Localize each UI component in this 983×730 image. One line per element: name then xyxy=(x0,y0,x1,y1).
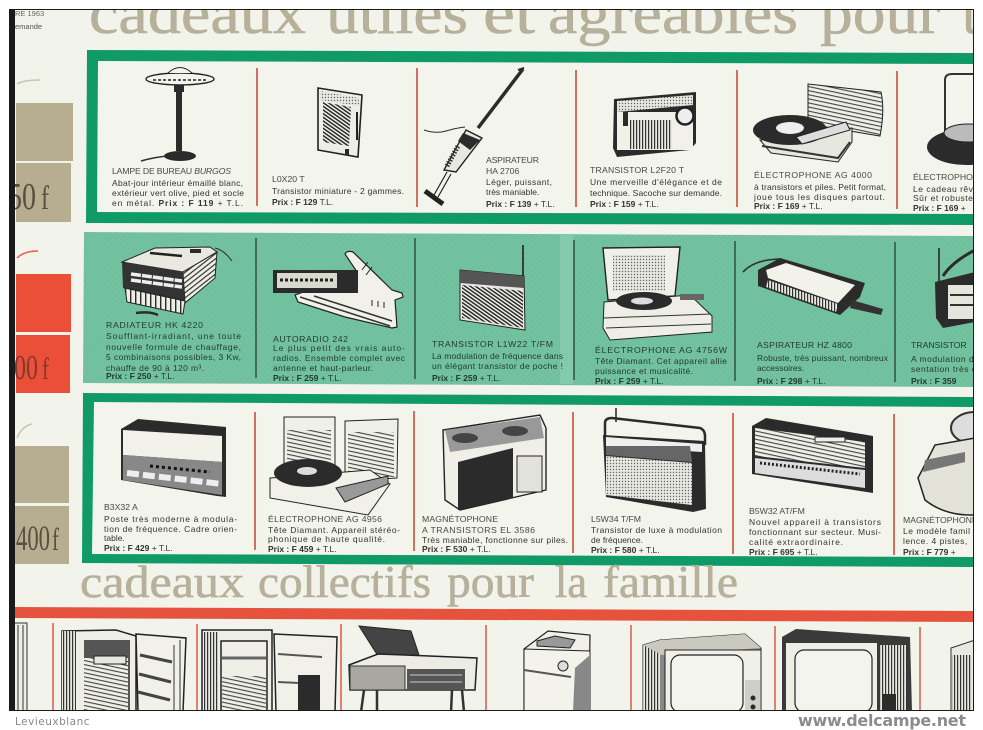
description xyxy=(757,340,889,386)
product: autoradio 242 xyxy=(273,251,406,383)
icon: reel recorder xyxy=(918,412,983,515)
description: joue tous les disques partout. xyxy=(753,192,885,202)
description xyxy=(104,502,237,553)
product: transistor L1W22 T/FM xyxy=(432,245,563,383)
description: de fréquence. xyxy=(591,535,643,545)
icon: pocket transistor xyxy=(318,88,362,157)
description xyxy=(422,514,568,554)
heading: cadeaux collectifs pour la famille: famille xyxy=(603,557,738,607)
icon: washing machine xyxy=(524,631,590,712)
description: chauffe de 90 à 120 m³. xyxy=(106,363,204,373)
heading: cadeaux collectifs pour la famille: collectifs xyxy=(258,557,431,607)
panel: gifts around 150 f xyxy=(86,50,983,225)
price tab: 100 f: f xyxy=(42,351,49,386)
product: B3X32 A xyxy=(104,419,237,553)
description xyxy=(590,165,722,209)
top left fragment text: RE 1963 xyxy=(15,9,44,18)
heading: cadeaux collectifs pour la famille: la xyxy=(555,557,587,607)
icon: radio xyxy=(613,92,696,157)
description: HA 2706 xyxy=(486,166,519,176)
description: Prix : F 459 + T.L. xyxy=(268,544,337,554)
description: TRANSISTOR L1W22 T/FM xyxy=(432,339,553,349)
heading: cadeaux collectifs pour la famille: pour xyxy=(447,557,534,607)
description: Tête Diamant. Appareil stéréo- xyxy=(268,525,400,535)
description: Tête Diamant. Cet appareil allie xyxy=(595,356,727,366)
description xyxy=(273,334,406,383)
price tab: 100 f xyxy=(14,251,71,393)
description: Prix : F 259 + T.L. xyxy=(432,373,501,383)
description: LAMPE DE BUREAU BURGOS xyxy=(112,166,231,176)
icon: round record player xyxy=(927,73,973,165)
description: Prix : F 259 + T.L. xyxy=(273,373,342,383)
description: B5W32 AT/FM xyxy=(749,506,805,516)
product: aspirateur HZ 4800 xyxy=(743,258,889,386)
description xyxy=(272,176,404,205)
icon: mains radio xyxy=(752,418,873,493)
description: TRANSISTOR xyxy=(911,340,967,350)
icon: television xyxy=(643,634,761,712)
description: Prix : F 159 + T.L. xyxy=(590,199,659,209)
price tab: 100 f: 00 xyxy=(14,348,38,387)
description: à transistors et piles. Petit format, xyxy=(754,182,886,192)
icon: partial appliance, right xyxy=(951,640,975,712)
description xyxy=(591,514,722,555)
product: L0X20 T xyxy=(272,88,404,207)
product: électrophone AG 4000 xyxy=(753,84,886,211)
description: Transistor miniature - 2 gammes. xyxy=(272,186,404,196)
description: L0X20 T xyxy=(272,174,305,184)
description: nouvelle formule de chauffage, xyxy=(106,342,241,352)
product: aspirateur HA 2706 xyxy=(424,68,555,209)
description: Prix : F 169 + T.L. xyxy=(754,201,823,211)
price tab: 400 f: f xyxy=(52,521,59,557)
icon: desk lamp xyxy=(141,68,214,161)
product: transistor L2F20 T xyxy=(590,92,722,209)
watermark: Levieuxblanc: Levieuxblanc xyxy=(15,716,90,728)
description: RADIATEUR HK 4220 xyxy=(106,320,203,330)
heading: cadeaux utiles et agréables pour t xyxy=(91,10,973,46)
description: Sûr et robuste xyxy=(913,193,973,203)
description: Nouvel appareil à transistors xyxy=(749,517,881,527)
icon: open refrigerator xyxy=(62,630,186,712)
icon: record console xyxy=(349,626,477,712)
product: B5W32 AT/FM xyxy=(749,418,881,557)
heading: cadeaux collectifs pour la famille xyxy=(80,557,738,607)
icon: radio with handle xyxy=(935,248,975,328)
description xyxy=(753,170,886,211)
heading: cadeaux collectifs pour la famille: cadeaux xyxy=(80,557,244,607)
description: TRANSISTOR L2F20 T xyxy=(590,165,685,175)
description: Léger, puissant, xyxy=(486,177,552,187)
description: un élégant transistor de poche ! xyxy=(432,361,563,371)
panel: family gifts xyxy=(12,607,975,713)
description: ÉLECTROPHONE AG 4956 xyxy=(268,514,382,524)
product: L5W34 T/FM xyxy=(591,408,722,555)
icon: stick vacuum xyxy=(424,68,524,204)
description: radios. Ensemble complet avec xyxy=(273,353,406,363)
product: lampe de bureau xyxy=(112,68,244,208)
price tab: 50 f: f xyxy=(41,180,49,217)
product: magnétophone (cropped) xyxy=(903,412,983,557)
price tab: 400 f xyxy=(15,424,69,564)
description: Prix : F 580 + T.L. xyxy=(591,545,660,555)
description: technique. Sacoche sur demande. xyxy=(590,188,722,198)
icon: canister vacuum xyxy=(743,258,883,315)
description: phonique de haute qualité. xyxy=(268,534,385,544)
icon: record player with open lid xyxy=(603,247,712,340)
description: Prix : F 250 + T.L. xyxy=(106,371,175,381)
icon: tape recorder xyxy=(443,415,546,510)
description xyxy=(112,166,244,208)
description: A TRANSISTORS EL 3586 xyxy=(422,525,535,535)
description: extérieur vert olive, pied et socle xyxy=(112,188,244,198)
product: transistor (cropped) xyxy=(911,248,977,386)
product: radiateur HK 4220 xyxy=(106,247,241,381)
product: électrophone AG 4756W xyxy=(595,247,728,386)
description: Prix : F 359 xyxy=(911,376,957,386)
panel: gifts around 400 f xyxy=(82,393,983,567)
description: Abat-jour intérieur émaillé blanc, xyxy=(112,178,243,188)
description: Le plus petit des vrais auto- xyxy=(273,343,405,353)
description: Le cadeau rêvé xyxy=(913,184,979,194)
description: ASPIRATEUR HZ 4800 xyxy=(757,340,852,350)
price tab: 50 f xyxy=(15,79,73,222)
description: tion de fréquence. Cadre orien- xyxy=(104,524,237,534)
description: antenne et haut-parleur. xyxy=(273,363,373,373)
description xyxy=(913,172,973,211)
product: électrophone (cropped) xyxy=(913,73,973,211)
description: Robuste, très puissant, nombreux xyxy=(757,353,889,363)
description: ÉLECTROPHONE xyxy=(913,172,983,182)
description: MAGNÉTOPHONE xyxy=(422,514,498,524)
description: Le modèle famil xyxy=(903,526,971,536)
description: ÉLECTROPHONE AG 4756W xyxy=(595,345,728,355)
description: ASPIRATEUR xyxy=(486,155,539,165)
price tab: 400 f: 400 xyxy=(16,518,50,558)
description: B3X32 A xyxy=(104,502,138,512)
watermark: www.delcampe.net: www.delcampe.net xyxy=(798,711,966,730)
top left fragment text: emande xyxy=(15,22,42,31)
description: Prix : F 530 + T.L. xyxy=(422,544,491,554)
price tab: 50 f: 50 xyxy=(8,176,36,218)
description: Une merveille d'élégance et de xyxy=(590,177,722,187)
icon: radio with antenna xyxy=(460,245,525,330)
description: L5W34 T/FM xyxy=(591,514,641,524)
description: Prix : F 259 + T.L. xyxy=(595,376,664,386)
description: en métal. Prix : F 119 + T.L. xyxy=(112,198,243,208)
description: AUTORADIO 242 xyxy=(273,334,348,344)
icon: stereo record player xyxy=(270,417,398,515)
icon: fan heater xyxy=(122,247,232,315)
description: Prix : F 139 + T.L. xyxy=(486,199,555,209)
description: accessoires. xyxy=(757,363,804,373)
description: ÉLECTROPHONE AG 4000 xyxy=(754,170,872,180)
description: fonctionnant sur secteur. Musi- xyxy=(749,527,881,537)
icon: record player xyxy=(753,84,883,162)
description xyxy=(911,340,977,386)
description xyxy=(268,514,400,554)
icon: car radio held in a glove xyxy=(273,251,403,328)
description: Prix : F 779 + xyxy=(903,547,956,557)
description: Très maniable, fonctionne sur piles. xyxy=(422,535,568,545)
description xyxy=(595,345,728,386)
icon: partial fridge, left xyxy=(12,623,27,713)
top left fragment text xyxy=(15,11,44,29)
description: A modulation d xyxy=(911,354,974,364)
description: Prix : F 695 + T.L. xyxy=(749,547,818,557)
description: très maniable. xyxy=(486,187,539,197)
red band xyxy=(15,607,973,622)
panel: gifts around 300 f xyxy=(83,232,977,387)
description: La modulation de fréquence dans xyxy=(432,351,563,361)
description: Prix : F 129 T.L. xyxy=(272,197,333,207)
description xyxy=(903,515,978,557)
description: Prix : F 429 + T.L. xyxy=(104,543,173,553)
description: Prix : F 169 + xyxy=(913,203,966,213)
icon: open refrigerator, second model xyxy=(202,630,337,712)
description: lence. 4 pistes, xyxy=(903,536,968,546)
description xyxy=(106,320,241,381)
description xyxy=(749,506,881,557)
description xyxy=(486,155,555,209)
description: Soufflant-irradiant, une toute xyxy=(106,331,241,341)
description: calité extraordinaire. xyxy=(749,537,843,547)
description: table. xyxy=(104,533,125,543)
description: Poste très moderne à modula- xyxy=(104,514,237,524)
product: électrophone AG 4956 xyxy=(268,417,400,554)
description: 5 combinaisons possibles, 3 Kw, xyxy=(106,352,241,362)
icon: portable radio xyxy=(603,408,706,512)
description: puissance et musicalité. xyxy=(595,366,693,376)
product: magnétophone EL 3586 xyxy=(422,415,568,554)
icon: table radio xyxy=(121,419,226,497)
description: sentation très é xyxy=(911,364,977,374)
description xyxy=(432,339,563,383)
description: Prix : F 298 + T.L. xyxy=(757,376,826,386)
icon: television, second model xyxy=(782,629,912,712)
description: MAGNÉTOPHONE xyxy=(903,515,978,525)
description: Transistor de luxe à modulation xyxy=(591,525,722,535)
